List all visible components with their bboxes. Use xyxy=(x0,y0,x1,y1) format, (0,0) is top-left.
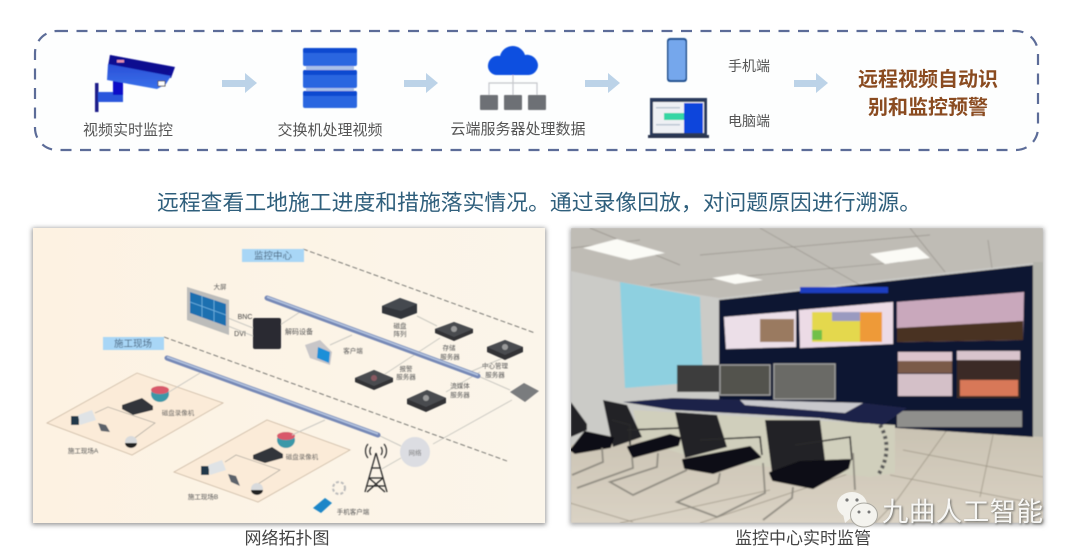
decoder: 解码设备 xyxy=(285,327,313,336)
video wall: DVI xyxy=(234,331,246,338)
streaming server xyxy=(407,381,470,412)
label: cloud: 云端服务器处理数据 xyxy=(450,121,586,138)
alarm server xyxy=(355,364,416,390)
alarm server: 报警 xyxy=(400,364,413,373)
panel: process flow xyxy=(35,31,1038,150)
arrow 4 xyxy=(794,73,828,93)
label: camera: 视频实时监控 xyxy=(83,122,173,139)
arrow 2 xyxy=(404,73,438,93)
icon: laptop xyxy=(648,98,709,138)
zone B xyxy=(174,420,350,502)
streaming server: 服务器 xyxy=(450,390,470,399)
dashed boundaries xyxy=(164,249,535,461)
central management server: 服务器 xyxy=(485,370,505,379)
label: monitoring centre xyxy=(242,249,304,262)
storage server xyxy=(435,322,473,361)
video wall: 大屏 xyxy=(214,282,227,291)
storage server: 存储 xyxy=(442,343,456,352)
arrow 3 xyxy=(585,73,620,93)
zone A: 磁盘录像机 xyxy=(162,408,195,417)
desk monitors xyxy=(677,364,835,399)
label: monitoring centre: 监控中心实时监管 xyxy=(735,529,871,548)
decoder xyxy=(253,318,313,349)
network cloud xyxy=(400,437,430,467)
disk array xyxy=(382,298,417,338)
streaming server: 流媒体 xyxy=(450,381,470,390)
icon: switch stack xyxy=(303,48,357,108)
panel: network topology xyxy=(32,228,546,525)
client monitor xyxy=(305,340,363,365)
chairs xyxy=(571,400,855,520)
zone B: 施工现场B xyxy=(188,492,218,501)
label: network topology: 网络拓扑图 xyxy=(244,529,330,548)
disk array: 阵列 xyxy=(394,329,406,338)
icon: phone xyxy=(667,38,687,82)
result text: 远程视频自动识 xyxy=(858,68,998,91)
watermark text: 九曲人工智能 xyxy=(882,497,1043,527)
desk xyxy=(623,398,907,477)
label: construction site: 施工现场 xyxy=(114,338,152,350)
wall screens xyxy=(724,311,796,349)
result text xyxy=(858,68,998,119)
panel: monitoring centre photo xyxy=(570,228,1044,527)
label: construction site xyxy=(103,337,164,350)
dashed frame xyxy=(35,31,1038,150)
storage server: 服务器 xyxy=(440,352,460,361)
label: computer: 电脑端 xyxy=(728,113,770,129)
network cloud: 网络 xyxy=(408,448,422,457)
video wall xyxy=(187,282,252,338)
central management server: 中心管理 xyxy=(482,361,508,370)
zone A: 施工现场A xyxy=(68,446,99,455)
ceiling lights xyxy=(583,239,930,284)
heading: 远程查看工地施工进度和措施落实情况。通过录像回放，对问题原因进行溯源。 xyxy=(157,190,921,215)
icon: surveillance camera xyxy=(95,55,175,112)
result text: 别和监控预警 xyxy=(868,96,988,119)
watermark xyxy=(837,492,1043,527)
icon: wechat xyxy=(837,492,878,527)
links xyxy=(169,312,512,470)
video wall xyxy=(719,265,1033,437)
firewall switch xyxy=(510,383,539,402)
client monitor: 客户端 xyxy=(343,346,363,355)
disk array: 磁盘 xyxy=(394,321,407,330)
alarm server: 服务器 xyxy=(396,372,416,381)
floor xyxy=(571,425,1043,523)
label: monitoring centre: 监控中心 xyxy=(254,250,292,262)
central management server xyxy=(482,340,523,379)
wall and ceiling xyxy=(571,262,1034,446)
icon: cloud servers xyxy=(480,46,546,110)
zone A xyxy=(47,373,223,455)
arrow 1 xyxy=(222,73,257,93)
video wall: BNC xyxy=(238,314,252,321)
blue blind xyxy=(620,282,703,388)
zone B: 磁盘录像机 xyxy=(286,452,319,461)
label: phone: 手机端 xyxy=(728,58,770,74)
icon: signal tower xyxy=(365,444,387,492)
bus: construction site xyxy=(167,357,378,435)
label: switch: 交换机处理视频 xyxy=(277,121,383,139)
bus: monitoring centre xyxy=(267,297,478,376)
mobile client xyxy=(313,482,370,516)
mobile client: 手机客户端 xyxy=(337,507,370,516)
